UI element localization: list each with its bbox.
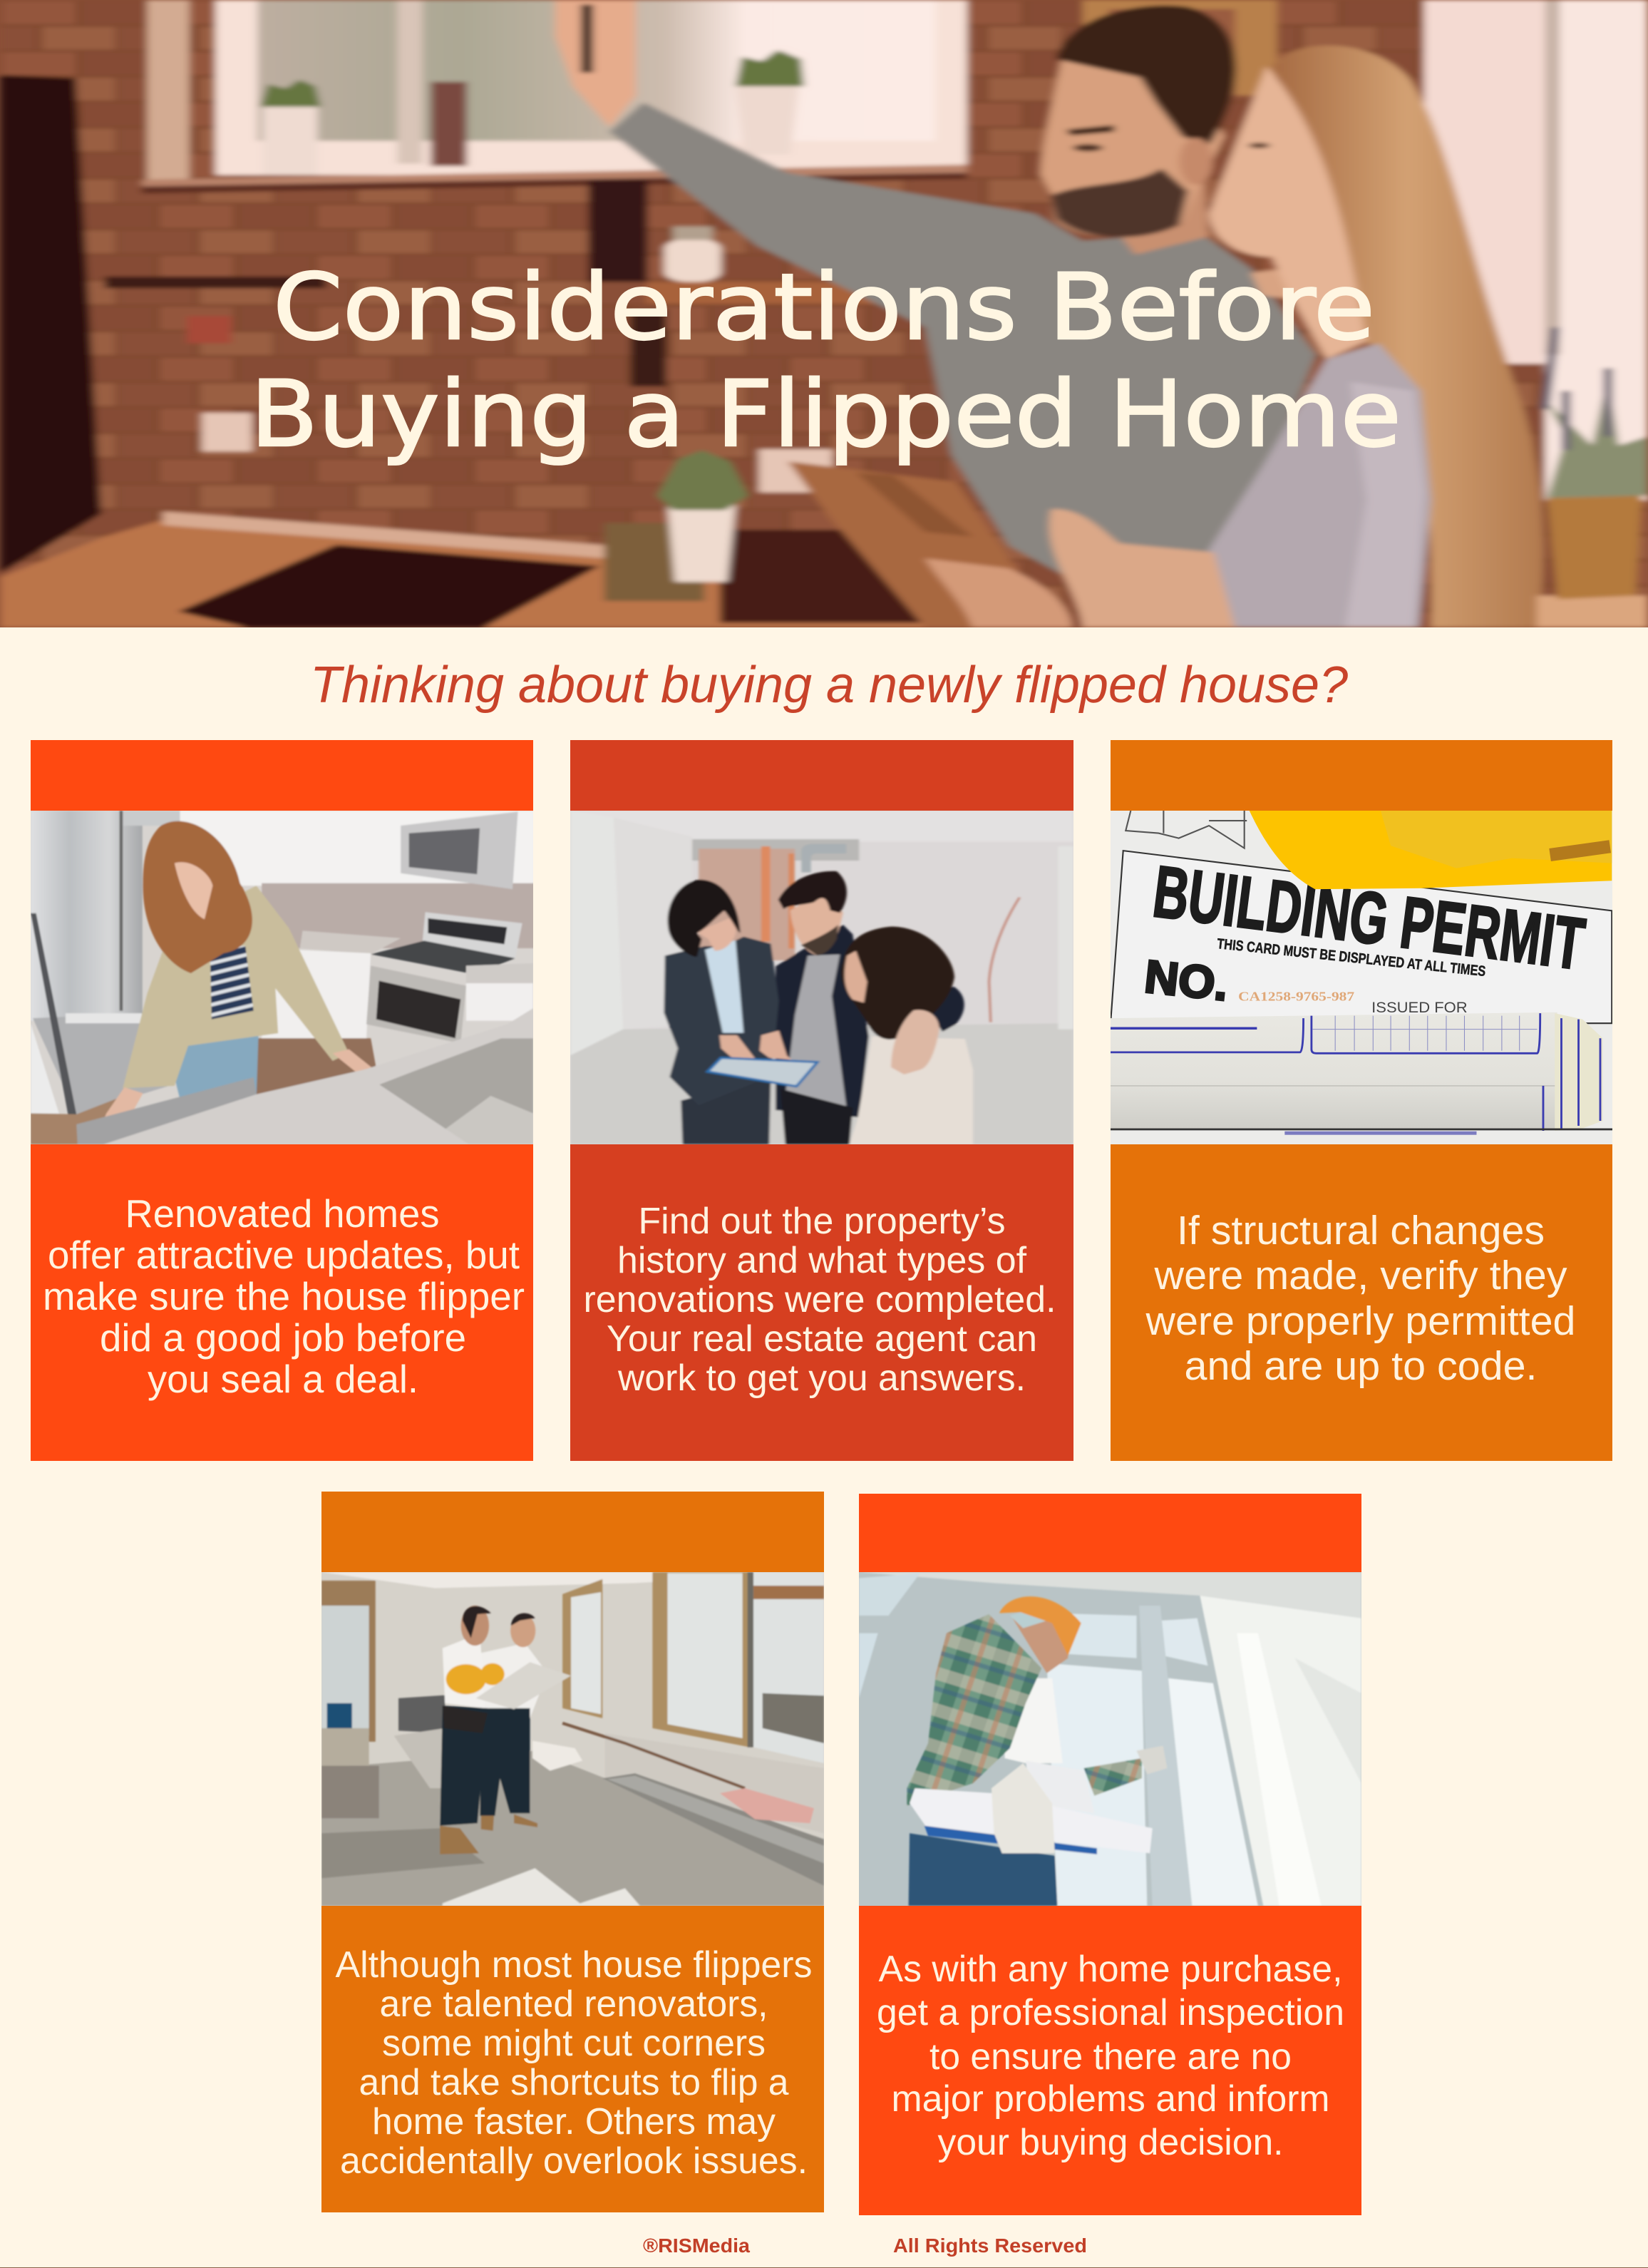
card 1 background xyxy=(31,740,533,1461)
card 3 text xyxy=(1145,1208,1575,1389)
panel: card 2 property history xyxy=(570,740,1073,1461)
card 3 text: and are up to code. xyxy=(1185,1343,1537,1389)
hero photo: couple inspecting a kitchen xyxy=(0,0,1648,627)
man in grey sweater xyxy=(555,0,1316,591)
panel: card 4 shortcuts xyxy=(321,1492,824,2212)
card 2 text: renovations were completed. xyxy=(583,1279,1056,1320)
rolled blueprint xyxy=(1111,1012,1612,1135)
two workers xyxy=(440,1606,571,1854)
card 1 text: did a good job before xyxy=(100,1315,466,1360)
card 3 text: If structural changes xyxy=(1177,1208,1545,1253)
material stacks xyxy=(321,1695,745,1818)
card 4 text xyxy=(335,1944,813,2182)
card 2 text: work to get you answers. xyxy=(617,1358,1026,1399)
wall outlets xyxy=(202,413,833,493)
card 4 text: and take shortcuts to flip a xyxy=(359,2062,789,2103)
card 1 text: you seal a deal. xyxy=(148,1357,418,1401)
windowsill plants and decor xyxy=(261,0,804,175)
card 1 text: make sure the house flipper xyxy=(43,1274,525,1318)
title: Buying a Flipped Home xyxy=(250,361,1401,468)
shelf with jars and pipe xyxy=(105,180,951,386)
range and cabinets xyxy=(257,811,533,1098)
card 2 text: Your real estate agent can xyxy=(607,1318,1037,1360)
card 1 text: offer attractive updates, but xyxy=(48,1233,520,1277)
card 4 text: home faster. Others may xyxy=(372,2101,776,2143)
card 4 background xyxy=(321,1492,824,2212)
hand on man's shoulder xyxy=(1251,268,1303,300)
counter plant and basket xyxy=(604,450,925,623)
windows xyxy=(321,1572,824,1763)
agent in dark blazer xyxy=(664,880,792,1144)
woman with curly hair and cream sweater xyxy=(841,927,973,1144)
card 2 photo: agent with couple xyxy=(570,811,1073,1144)
card 2 background xyxy=(570,740,1073,1461)
concrete slab and insulation xyxy=(602,1773,824,1886)
card 4 photo: contractors reviewing plans in gutted room xyxy=(321,1572,824,1906)
window and sill xyxy=(142,0,967,194)
card 2 text: Find out the property’s xyxy=(639,1201,1005,1242)
card 5 text: As with any home purchase, xyxy=(878,1949,1343,1990)
card 5 text: to ensure there are no xyxy=(929,2036,1292,2078)
footer credit: ®RISMedia xyxy=(643,2234,750,2257)
panel: card 1 renovated homes xyxy=(31,740,535,1461)
top right wood shelf and wall xyxy=(1083,0,1648,500)
card 5 text: your buying decision. xyxy=(938,2122,1283,2163)
permit number: CA1258-9765-987 xyxy=(1238,990,1354,1004)
clipboard and hands xyxy=(788,461,1072,627)
card 4 text: accidentally overlook issues. xyxy=(340,2140,808,2182)
permit headline printed on card: THIS CARD MUST BE DISPLAYED AT ALL TIMES xyxy=(1216,935,1486,980)
hard hat xyxy=(1250,811,1612,889)
footer rights notice: All Rights Reserved xyxy=(893,2234,1087,2257)
issued for label: ISSUED FOR xyxy=(1371,1000,1468,1016)
card 4 text: Although most house flippers xyxy=(335,1944,813,1986)
card 5 background xyxy=(859,1494,1361,2215)
lavender in woven basket xyxy=(1537,327,1648,627)
inspector with plaid shirt xyxy=(907,1596,1167,1906)
title: Considerations Before xyxy=(273,255,1375,361)
card 5 text: get a professional inspection xyxy=(877,1992,1344,2033)
card 5 text: major problems and inform xyxy=(891,2078,1330,2120)
card 1 text xyxy=(43,1191,525,1401)
card 3 background xyxy=(1111,740,1612,1461)
clipboard xyxy=(708,1058,818,1087)
card 3 photo: building permit card, hard hat and plans xyxy=(1111,811,1612,1144)
card 2 text xyxy=(583,1201,1056,1399)
card 1 photo: woman in a kitchen xyxy=(31,811,533,1144)
permit card xyxy=(1111,851,1612,1023)
panel: card 3 permits xyxy=(1111,740,1612,1461)
floor papers xyxy=(443,1868,640,1906)
man with beard in jacket xyxy=(776,871,869,1144)
woman with long hair xyxy=(1049,46,1543,627)
fridge xyxy=(31,811,180,1144)
floor plan sketch xyxy=(1126,811,1247,848)
card 1 text: Renovated homes xyxy=(125,1191,439,1236)
wooden counter and cooktop xyxy=(0,511,946,627)
granite island with steel side xyxy=(76,1008,533,1144)
card 2 text: history and what types of xyxy=(617,1240,1027,1281)
left dark cabinet xyxy=(0,75,101,574)
card 5 photo: inspector at a window xyxy=(859,1572,1361,1906)
panel: card 5 inspection xyxy=(859,1494,1361,2215)
card 5 text xyxy=(877,1949,1344,2163)
title xyxy=(250,255,1401,468)
card 4 text: some might cut corners xyxy=(382,2023,766,2064)
card 4 text: are talented renovators, xyxy=(379,1984,768,2025)
woman with curly hair xyxy=(96,821,379,1139)
subtitle: Thinking about buying a newly flipped house? xyxy=(310,657,1348,714)
card 3 text: were properly permitted xyxy=(1145,1298,1575,1344)
card 3 text: were made, verify they xyxy=(1153,1253,1567,1298)
permit headline printed on card: NO. xyxy=(1143,950,1230,1010)
